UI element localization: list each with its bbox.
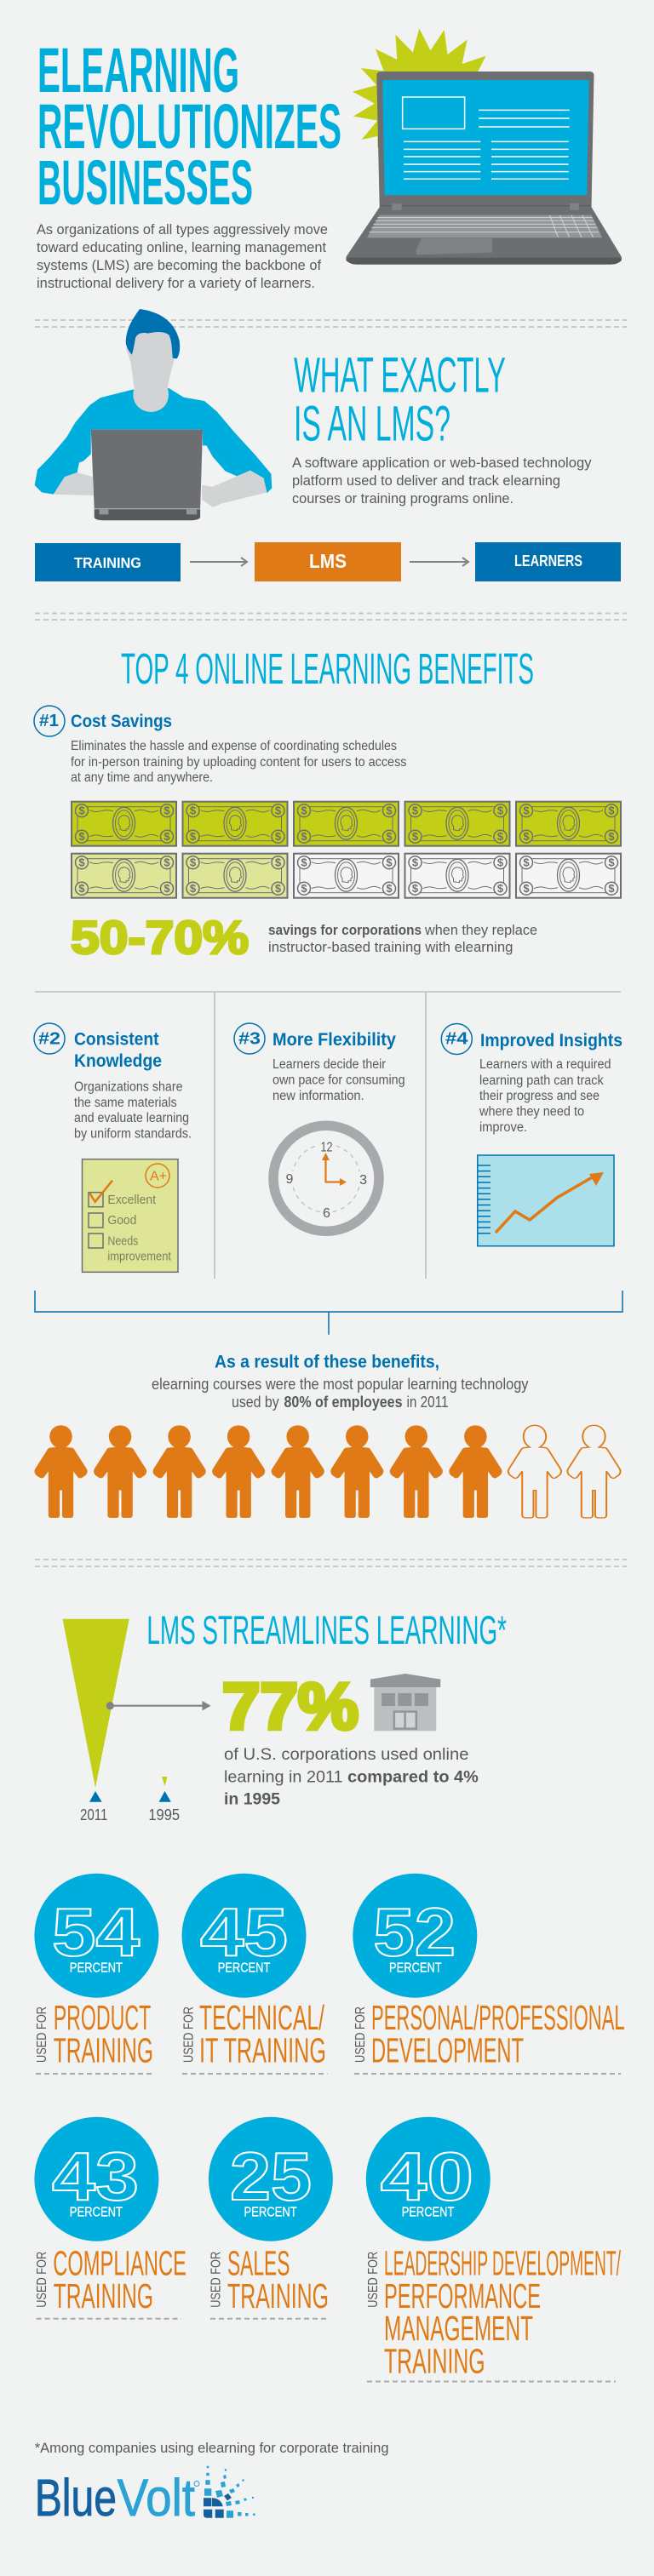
stat: 25 percent sales training	[209, 2117, 333, 2319]
icons: dollar bills pictogram: $	[497, 830, 504, 843]
icons: dollar bills pictogram: $	[275, 882, 282, 895]
flow: LMS	[255, 542, 401, 581]
description: improved insights: Learners with a required	[479, 1057, 611, 1072]
stat: 40 percent leadership development: TRAINING	[384, 2341, 485, 2380]
icon: corporate building	[370, 1674, 440, 1731]
description: cost savings: Eliminates the hassle and expense of coordinating schedules	[71, 739, 397, 753]
divider	[35, 1560, 627, 1566]
statistic caption	[268, 923, 537, 955]
stat: 52 percent personal development: PERCENT	[389, 1961, 442, 1976]
arrow: wedge to statistic	[106, 1701, 211, 1710]
icon: report card checklist	[82, 1159, 178, 1272]
description: consistent knowledge: and evaluate learning	[74, 1111, 189, 1125]
LMS definition: A software application or web-based technology	[292, 455, 592, 471]
description: consistent knowledge: Organizations share	[74, 1080, 182, 1095]
description: more flexibility	[272, 1057, 405, 1103]
flow: training	[35, 543, 181, 581]
icon: report card checklist: improvement	[107, 1250, 172, 1264]
icons: dollar bills pictogram: $	[275, 804, 282, 817]
icons: dollar bills pictogram: $	[301, 882, 307, 895]
icon: clock: 9	[286, 1172, 294, 1187]
icons: dollar bills pictogram: $	[386, 882, 393, 895]
title	[37, 35, 341, 218]
icons: dollar bills pictogram: $	[386, 804, 393, 817]
stat: 54 percent product training: PERCENT	[70, 1961, 123, 1976]
icon: person at laptop	[35, 309, 272, 520]
icons: dollar bills pictogram: $	[275, 830, 282, 843]
arrow: LMS to learners	[410, 558, 468, 566]
stat: 45 percent technical training: IT TRAINING	[199, 2031, 326, 2070]
statistic caption: instructor-based training with elearning	[268, 940, 513, 955]
icons: dollar bills pictogram: $	[190, 882, 197, 895]
title: REVOLUTIONIZES	[37, 91, 341, 162]
statistic caption: 77%	[224, 1745, 479, 1808]
icon: report card checklist: A+	[150, 1170, 167, 1184]
icons: dollar bills pictogram: $	[523, 856, 530, 869]
icons: dollar bills pictogram: $	[190, 804, 197, 817]
logo: BlueVolt: Volt	[118, 2469, 195, 2527]
logo: BlueVolt	[35, 2466, 255, 2527]
stat: 43 percent compliance training	[34, 2117, 186, 2319]
flow: LMS: LMS	[309, 550, 347, 572]
badge #3: #3	[238, 1030, 261, 1049]
stat: 45 percent technical training: PERCENT	[218, 1961, 271, 1976]
stat: 40 percent leadership development: USED FOR	[366, 2252, 381, 2308]
stat: 40 percent leadership development: PERCENT	[402, 2205, 455, 2219]
panel: more flexibility	[234, 1023, 405, 1231]
icons: dollar bills pictogram: $	[164, 882, 170, 895]
stat: 54 percent product training: TRAINING	[54, 2031, 153, 2070]
stat: 52 percent personal development: DEVELOPMENT	[371, 2031, 524, 2070]
LMS definition: platform used to deliver and track elearning	[292, 472, 560, 489]
icons: dollar bills pictogram: $	[523, 804, 530, 817]
arrow: training to LMS	[190, 558, 247, 566]
flow: training: TRAINING	[74, 554, 141, 571]
stat: 45 percent technical training: 45	[200, 1894, 288, 1970]
icons: dollar bills pictogram: $	[190, 830, 197, 843]
badge #3	[234, 1023, 265, 1054]
description: consistent knowledge	[74, 1080, 192, 1142]
flow: learners: LEARNERS	[514, 552, 582, 570]
title: BUSINESSES	[37, 147, 253, 218]
footnote: *Among companies using elearning for corporate training	[35, 2440, 388, 2456]
badge #1: #1	[39, 712, 59, 730]
result text: elearning courses were the most popular learning technology	[152, 1376, 528, 1393]
icons: dollar bills pictogram: $	[412, 830, 419, 843]
chart: growth wedges: 2011	[80, 1806, 107, 1823]
LMS definition	[292, 455, 592, 507]
icon: clock: 6	[323, 1206, 330, 1221]
badge #2	[34, 1023, 65, 1054]
icons: dollar bills pictogram: $	[301, 830, 307, 843]
icons: dollar bills pictogram: $	[497, 804, 504, 817]
description: cost savings	[71, 739, 407, 785]
icons: dollar bills pictogram: $	[497, 882, 504, 895]
icons: dollar bills pictogram: $	[608, 804, 615, 817]
heading: what exactly is an LMS	[294, 347, 506, 451]
stat: 25 percent sales training: SALES	[227, 2244, 290, 2283]
icons: dollar bills pictogram: $	[608, 856, 615, 869]
description: more flexibility: new information.	[272, 1089, 364, 1103]
divider	[35, 613, 627, 620]
chart: growth wedges	[63, 1619, 180, 1823]
statistic caption: 77%: of U.S. corporations used online	[224, 1745, 468, 1764]
stat: 52 percent personal development	[353, 1874, 625, 2074]
icons: dollar bills pictogram: $	[412, 882, 419, 895]
stat: 43 percent compliance training: USED FOR	[35, 2252, 49, 2308]
statistic caption: savings for corporations	[268, 923, 422, 938]
description: improved insights: improve.	[479, 1120, 527, 1135]
statistic: 50-70%: 50-70%	[71, 911, 249, 964]
stat: 43 percent compliance training: TRAINING	[54, 2276, 153, 2316]
line chart icon	[478, 1155, 614, 1246]
stat: 52 percent personal development: 52	[373, 1894, 456, 1970]
description: more flexibility: own pace for consuming	[272, 1073, 405, 1088]
stat: 54 percent product training: USED FOR	[35, 2006, 49, 2063]
stat: 54 percent product training: 54	[52, 1894, 141, 1970]
stat: 54 percent product training	[34, 1874, 158, 2074]
intro text	[37, 221, 328, 291]
heading: cost savings: Cost Savings	[71, 712, 172, 731]
heading: more flexibility: More Flexibility	[272, 1030, 396, 1050]
title: ELEARNING	[37, 35, 239, 106]
icons: dollar bills pictogram: $	[190, 856, 197, 869]
badge #1	[34, 706, 65, 736]
LMS definition: courses or training programs online.	[292, 490, 513, 507]
logo: BlueVolt: Blue	[35, 2469, 117, 2527]
statistic caption: when they replace	[424, 923, 537, 938]
statistic caption: 77%: learning in 2011	[224, 1767, 343, 1786]
icons: dollar bills pictogram: $	[386, 830, 393, 843]
bracket connector	[35, 1291, 622, 1335]
icons: dollar bills pictogram: $	[608, 882, 615, 895]
icons: dollar bills pictogram: $	[78, 830, 85, 843]
panel: consistent knowledge	[34, 1023, 192, 1272]
icons: dollar bills pictogram: $	[412, 804, 419, 817]
icons: dollar bills pictogram: $	[412, 856, 419, 869]
description: cost savings: for in-person training by uploading content for users to access	[71, 755, 407, 770]
stat: 25 percent sales training: 25	[230, 2138, 312, 2214]
stat: 25 percent sales training: USED FOR	[209, 2252, 224, 2308]
description: improved insights: learning path can track	[479, 1073, 604, 1088]
stat: 45 percent technical training: TECHNICAL/	[199, 1998, 324, 2037]
icons: dollar bills pictogram: $	[523, 830, 530, 843]
stat: 52 percent personal development: USED FOR	[353, 2006, 368, 2063]
icons: dollar bills pictogram: $	[386, 856, 393, 869]
intro text: instructional delivery for a variety of learners.	[37, 275, 315, 291]
heading: consistent knowledge: Consistent	[74, 1030, 159, 1050]
heading: improved insights: Improved Insights	[480, 1031, 622, 1050]
badge #4: #4	[445, 1030, 469, 1049]
icon: report card checklist: Good	[107, 1213, 136, 1228]
description: more flexibility: Learners decide their	[272, 1057, 386, 1072]
icon: clock: 3	[359, 1173, 367, 1188]
stat: 45 percent technical training	[181, 1874, 327, 2074]
stat: 43 percent compliance training: PERCENT	[70, 2205, 123, 2219]
description: improved insights: their progress and see	[479, 1089, 600, 1103]
stat: 40 percent leadership development	[366, 2117, 621, 2382]
heading: what exactly is an LMS: IS AN LMS?	[294, 397, 450, 451]
stat: 40 percent leadership development: 40	[381, 2138, 473, 2214]
panel grid lines	[35, 992, 621, 1279]
benefit 1: cost savings	[34, 706, 621, 964]
icons: dollar bills pictogram: $	[497, 856, 504, 869]
description: cost savings: at any time and anywhere.	[71, 770, 213, 785]
icon: report card checklist: Needs	[107, 1234, 138, 1249]
icons: dollar bills pictogram: $	[301, 804, 307, 817]
stat: 25 percent sales training: TRAINING	[227, 2276, 329, 2316]
description: consistent knowledge: the same materials	[74, 1096, 177, 1110]
icons: dollar bills pictogram: $	[78, 856, 85, 869]
description: consistent knowledge: by uniform standards.	[74, 1127, 192, 1142]
stat: 43 percent compliance training: COMPLIANCE	[53, 2244, 186, 2283]
stat: 40 percent leadership development: PERFORMANCE	[384, 2276, 541, 2316]
icon: laptop with burst	[347, 28, 622, 265]
result text: As a result of these benefits,	[215, 1353, 439, 1372]
divider	[35, 320, 627, 327]
intro text: systems (LMS) are becoming the backbone of	[37, 257, 321, 273]
stat: 54 percent product training: PRODUCT	[54, 1998, 151, 2037]
heading: consistent knowledge	[74, 1030, 162, 1071]
icons: dollar bills pictogram: $	[608, 830, 615, 843]
icons: dollar bills pictogram: $	[523, 882, 530, 895]
stat: 25 percent sales training: PERCENT	[244, 2205, 297, 2219]
statistic caption: 77%: in 1995	[224, 1789, 280, 1808]
description: improved insights: where they need to	[479, 1105, 584, 1119]
panel: improved insights	[441, 1023, 622, 1246]
intro text: toward educating online, learning management	[37, 239, 326, 255]
icons: dollar bills pictogram	[72, 802, 621, 898]
result text: used by	[232, 1394, 279, 1411]
icons: dollar bills pictogram: $	[275, 856, 282, 869]
heading: consistent knowledge: Knowledge	[74, 1051, 162, 1071]
icon: report card checklist: Excellent	[107, 1193, 157, 1207]
stat: 45 percent technical training: USED FOR	[181, 2006, 196, 2063]
result text: in 2011	[407, 1394, 448, 1411]
icons: dollar bills pictogram: $	[301, 856, 307, 869]
icons: dollar bills pictogram: $	[164, 804, 170, 817]
flow: learners	[475, 542, 621, 581]
badge #2: #2	[38, 1030, 60, 1049]
icons: dollar bills pictogram: $	[78, 882, 85, 895]
result text: 80% of employees	[284, 1394, 402, 1411]
icons: dollar bills pictogram: $	[78, 804, 85, 817]
intro text: As organizations of all types aggressively move	[37, 221, 328, 238]
stat: 43 percent compliance training: 43	[52, 2138, 139, 2214]
statistic: 77%: 77%	[222, 1670, 359, 1743]
pictogram: 8 of 10 people	[34, 1425, 621, 1518]
statistic caption: 77%: compared to 4%	[347, 1767, 479, 1786]
stat: 40 percent leadership development: MANAGEMENT	[384, 2309, 533, 2348]
icons: dollar bills pictogram: $	[164, 830, 170, 843]
icons: dollar bills pictogram: $	[164, 856, 170, 869]
description: improved insights	[479, 1057, 611, 1135]
badge #4	[441, 1023, 472, 1054]
icon: clock	[273, 1125, 379, 1231]
icon: clock: 12	[320, 1141, 333, 1155]
result text	[152, 1353, 528, 1411]
chart: growth wedges: 1995	[148, 1806, 180, 1823]
